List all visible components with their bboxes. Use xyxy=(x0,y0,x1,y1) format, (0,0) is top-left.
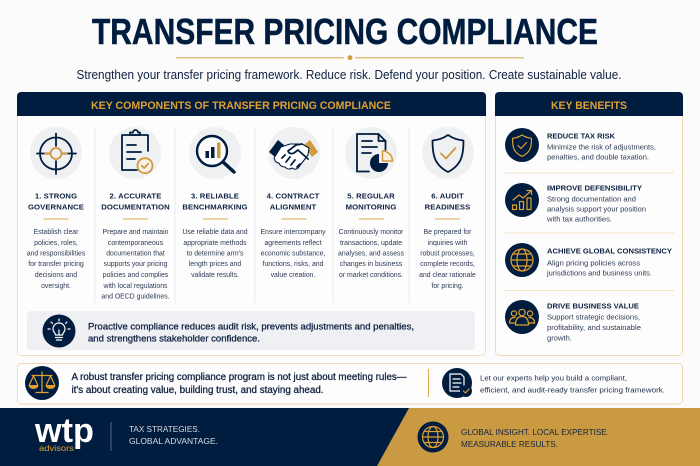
description: analyses, and assess xyxy=(338,250,404,258)
description: length prices and xyxy=(189,261,241,268)
benefit: drive business value xyxy=(505,300,641,342)
description: with local regulations xyxy=(103,283,168,290)
benefit: improve defensibility: analysis support your position xyxy=(547,207,646,214)
heading: 1. STRONG xyxy=(35,192,77,200)
heading: 2. ACCURATE xyxy=(110,192,161,200)
banner text: A robust transfer pricing compliance program is not just about meeting rules— xyxy=(72,372,407,383)
benefit: improve defensibility xyxy=(505,183,646,224)
logo: wtp advisors: advisors xyxy=(39,444,74,453)
banner: closing message xyxy=(18,364,682,404)
panel header: key benefits: KEY BENEFITS xyxy=(551,100,627,112)
icon: shield xyxy=(505,128,539,162)
icon: clipboard xyxy=(109,127,161,179)
description: validate results. xyxy=(191,272,239,279)
benefit text: IMPROVE DEFENSIBILITY xyxy=(547,184,642,193)
icon: target xyxy=(30,127,82,179)
icon: globe xyxy=(505,243,539,277)
description: decisions and xyxy=(35,272,77,279)
description: value creation. xyxy=(271,272,315,279)
icon: handshake xyxy=(268,127,320,179)
benefit: achieve global consistency xyxy=(505,243,672,278)
benefit: drive business value: profitability, and sustainable xyxy=(547,325,641,332)
benefit text: DRIVE BUSINESS VALUE xyxy=(547,302,639,311)
heading: MONITORING xyxy=(346,202,396,212)
description: robust processes, xyxy=(420,250,475,258)
panel header: key components: KEY COMPONENTS OF TRANSFER PRICING COMPLIANCE xyxy=(91,100,391,112)
icon: document with pie chart xyxy=(345,127,397,179)
description: and OECD guidelines. xyxy=(101,294,170,300)
benefit: drive business value: Support strategic decisions, xyxy=(547,314,640,322)
icon: people xyxy=(505,300,539,334)
callout text: Proactive compliance reduces audit risk, prevents adjustments and penalties, xyxy=(88,321,414,332)
benefit: achieve global consistency: jurisdictions and business units. xyxy=(546,271,652,278)
description: inquiries with xyxy=(428,240,468,247)
icon: scales xyxy=(25,366,59,400)
footer: MEASURABLE RESULTS. xyxy=(461,440,558,449)
benefit text: ACHIEVE GLOBAL CONSISTENCY xyxy=(547,247,672,256)
benefit: drive business value: growth. xyxy=(547,335,572,342)
panel header: key benefits xyxy=(495,92,683,116)
description: and clear rationale xyxy=(419,272,476,279)
heading: ALIGNMENT xyxy=(270,202,317,212)
description: functions, risks, and xyxy=(263,261,324,268)
panel: key benefits xyxy=(495,92,683,356)
panel header: key components xyxy=(17,92,486,116)
banner: closing message: efficient, and audit-ready transfer pricing framework. xyxy=(480,386,665,394)
description: policies, roles, xyxy=(34,240,78,247)
heading: 4. CONTRACT xyxy=(267,192,319,200)
icon: lightbulb xyxy=(42,314,76,348)
column 6: audit readiness xyxy=(419,127,476,290)
description: or market conditions. xyxy=(339,272,403,279)
description: changes in business xyxy=(340,261,403,268)
description: economic substance, xyxy=(261,250,325,258)
description: Continuously monitor xyxy=(339,229,403,236)
icon: rising chart xyxy=(505,183,539,217)
benefit: reduce tax risk xyxy=(505,128,656,162)
description: appropriate methods xyxy=(183,240,247,247)
banner: closing message: it's about creating value, building trust, and staying ahead. xyxy=(72,385,324,396)
description: Prepare and maintain xyxy=(103,229,168,236)
footer xyxy=(0,408,700,466)
heading: BENCHMARKING xyxy=(182,202,248,212)
title: TRANSFER PRICING COMPLIANCE xyxy=(92,11,598,52)
icon: shield check xyxy=(422,127,474,179)
call to action text: Let our experts help you build a compliant, xyxy=(480,374,627,382)
column 2: accurate documentation xyxy=(101,127,170,300)
panel: key components xyxy=(17,92,486,356)
icon: magnifier chart xyxy=(189,127,241,179)
footer message: GLOBAL INSIGHT. LOCAL EXPERTISE. xyxy=(461,428,609,437)
heading: 3. RELIABLE xyxy=(191,192,239,200)
column 3: reliable benchmarking xyxy=(182,127,248,279)
footer: GLOBAL ADVANTAGE. xyxy=(129,437,218,446)
description: complete records, xyxy=(420,261,475,268)
description: supports your pricing xyxy=(104,261,168,268)
logo: wtp advisors: wtp xyxy=(34,412,94,450)
callout: proactive compliance xyxy=(27,311,475,350)
subtitle: Strengthen your transfer pricing framework. Reduce risk. Defend your position. Create sustainable value. xyxy=(76,67,622,82)
benefit: reduce tax risk: Minimize the risk of adjustments, xyxy=(547,144,656,152)
description: to determine arm's xyxy=(187,250,244,258)
heading: DOCUMENTATION xyxy=(101,202,170,212)
benefit: improve defensibility: Strong documentation and xyxy=(547,196,636,204)
description: Establish clear xyxy=(34,229,78,236)
description: oversight. xyxy=(41,283,71,290)
description: for pricing. xyxy=(431,283,464,290)
column 5: regular monitoring xyxy=(338,127,404,279)
title divider xyxy=(176,55,524,60)
icon: document check xyxy=(442,368,472,398)
column 4: contract alignment xyxy=(260,127,326,279)
description: transactions, update xyxy=(340,240,402,247)
benefit: reduce tax risk: penalties, and double taxation. xyxy=(547,155,649,162)
icon: globe xyxy=(418,422,448,452)
description: Use reliable data and xyxy=(182,229,248,236)
description: for transfer pricing xyxy=(28,261,84,268)
column 1: strong governance xyxy=(27,127,86,290)
description: Be prepared for xyxy=(424,229,471,236)
description: documentation that xyxy=(106,250,165,258)
heading: 5. REGULAR xyxy=(347,192,395,200)
heading: 6. AUDIT xyxy=(431,192,464,200)
heading: READINESS xyxy=(425,202,470,212)
description: agreements reflect xyxy=(264,240,322,247)
benefit: improve defensibility: with tax authorities. xyxy=(546,217,612,224)
description: contemporaneous xyxy=(108,240,164,247)
tagline: TAX STRATEGIES. xyxy=(129,425,200,434)
benefit text: REDUCE TAX RISK xyxy=(547,132,616,141)
description: and responsibilities xyxy=(27,250,86,258)
benefit: achieve global consistency: Align pricing policies across xyxy=(547,260,641,268)
heading: GOVERNANCE xyxy=(28,202,84,212)
description: policies and complies xyxy=(103,272,169,279)
callout: proactive compliance: and strengthens stakeholder confidence. xyxy=(88,334,260,344)
description: Ensure intercompany xyxy=(260,229,326,236)
